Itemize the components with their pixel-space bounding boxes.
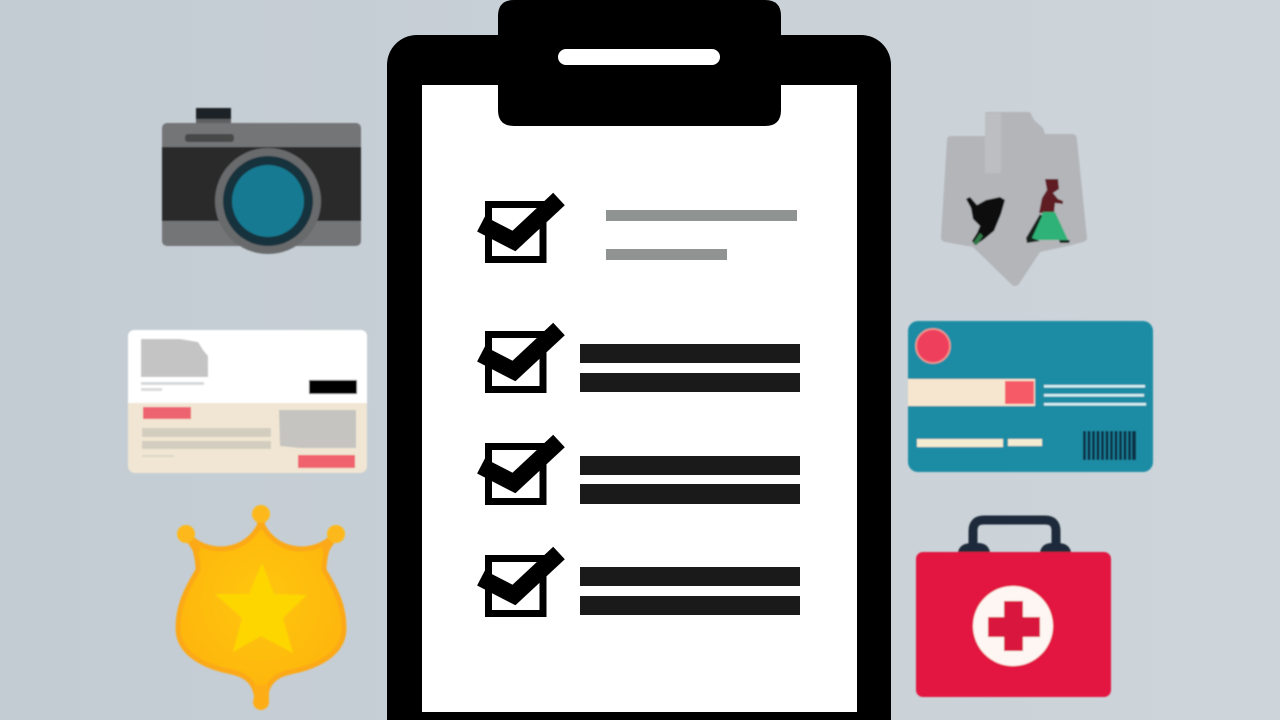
icon: people on gray sign: [941, 112, 1087, 286]
walking figure: [1039, 179, 1063, 213]
icon: teal ID card: [908, 321, 1153, 472]
checklist row 1: [481, 199, 797, 260]
icon: checkbox 1: [481, 199, 559, 260]
icon: police badge: [177, 505, 345, 710]
clipboard paper: [422, 85, 857, 712]
row 2 text lines: [580, 344, 800, 392]
panel: clipboard: [387, 0, 891, 720]
icon: camera: [162, 108, 361, 254]
row 4 text lines: [580, 567, 800, 615]
barcode: [1083, 431, 1136, 460]
row 3 text lines: [580, 456, 800, 504]
icon: left ID card: [128, 330, 367, 473]
icon: checkbox 3: [481, 441, 559, 502]
clipboard clip: [498, 0, 781, 126]
clipboard board: [387, 35, 891, 720]
clip slot: [558, 49, 720, 65]
checklist row 4: [481, 553, 800, 615]
checklist row 3: [481, 441, 800, 504]
row 1 text lines: [606, 210, 797, 260]
icon: first aid kit: [916, 520, 1111, 697]
dark figure: [966, 197, 1005, 245]
icon: checkbox 2: [481, 329, 559, 390]
icon: checkbox 4: [481, 553, 559, 614]
checklist row 2: [481, 329, 800, 392]
